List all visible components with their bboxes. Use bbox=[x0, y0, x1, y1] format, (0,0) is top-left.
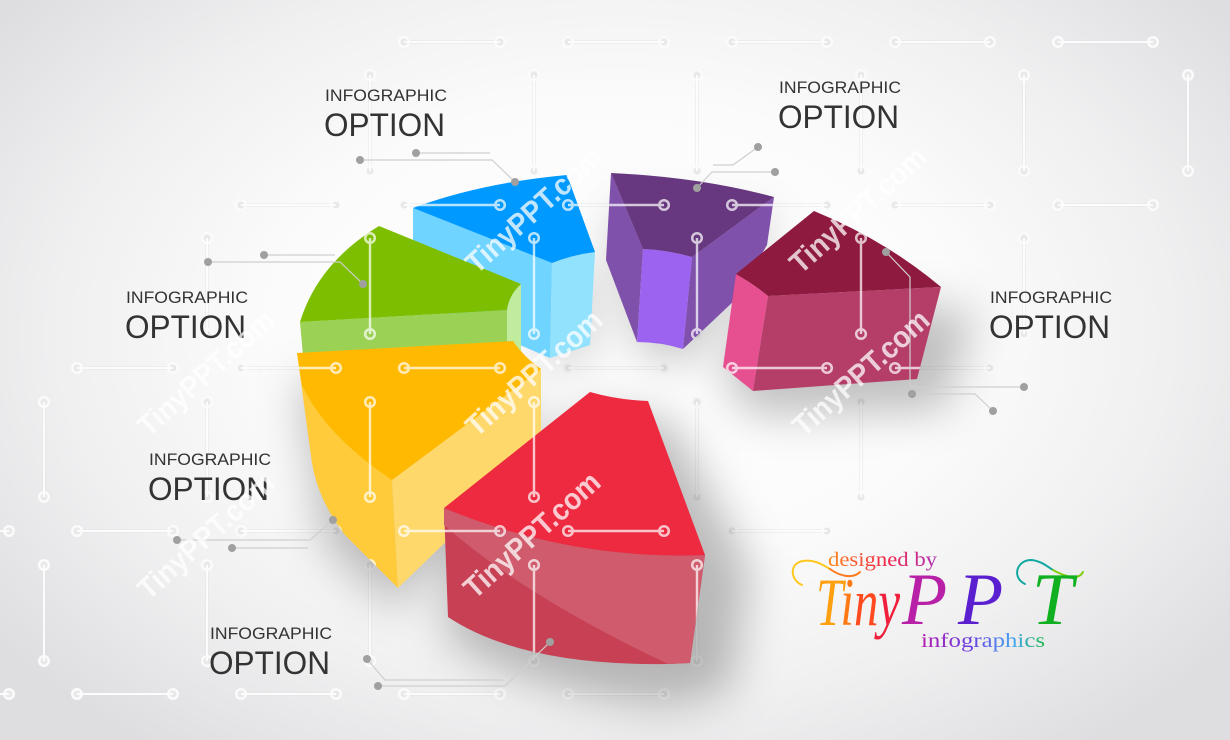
label: bottom option: INFOGRAPHIC bbox=[210, 624, 332, 643]
label: lower left option: OPTION bbox=[148, 471, 269, 507]
leader lines and dots bbox=[173, 143, 1028, 690]
watermarks: TinyPPT.com bbox=[786, 304, 936, 443]
logo: designed by TinyPPT infographics: T bbox=[1032, 559, 1078, 641]
label: lower left option bbox=[148, 450, 271, 507]
slice: yellow bbox=[297, 341, 541, 588]
slice: magenta bbox=[723, 211, 941, 391]
watermarks: TinyPPT.com bbox=[131, 467, 281, 606]
label: top right option bbox=[778, 78, 901, 135]
label: top left option: OPTION bbox=[324, 107, 445, 143]
label: lower left option: INFOGRAPHIC bbox=[149, 450, 271, 469]
watermarks: TinyPPT.com bbox=[783, 141, 933, 280]
pie chart bbox=[297, 173, 941, 664]
logo: designed by TinyPPT infographics: Tiny bbox=[816, 564, 901, 640]
label: bottom option bbox=[209, 624, 332, 681]
slice: blue bbox=[413, 175, 595, 358]
label: left option: OPTION bbox=[125, 309, 246, 345]
watermarks: TinyPPT.com bbox=[131, 304, 281, 443]
watermarks: TinyPPT.com bbox=[459, 141, 609, 280]
label: right option bbox=[989, 288, 1112, 345]
slice: green bbox=[300, 226, 521, 356]
label: top right option: INFOGRAPHIC bbox=[779, 78, 901, 97]
logo: designed by TinyPPT infographics bbox=[793, 549, 1083, 652]
label: top left option bbox=[324, 86, 447, 143]
label: left option bbox=[125, 288, 248, 345]
label: bottom option: OPTION bbox=[209, 645, 330, 681]
slice: red bbox=[444, 392, 705, 664]
label: left option: INFOGRAPHIC bbox=[126, 288, 248, 307]
label: right option: OPTION bbox=[989, 309, 1110, 345]
logo: designed by TinyPPT infographics: infographics bbox=[921, 630, 1045, 652]
watermarks bbox=[131, 141, 936, 606]
logo: designed by TinyPPT infographics: P bbox=[957, 559, 1003, 641]
drop shadows under chart pieces bbox=[297, 210, 975, 705]
logo: designed by TinyPPT infographics: designed by bbox=[828, 549, 937, 571]
label: top right option: OPTION bbox=[778, 99, 899, 135]
watermarks: TinyPPT.com bbox=[459, 304, 609, 443]
circuit lines over chart bbox=[299, 199, 920, 652]
slice: purple bbox=[606, 173, 774, 349]
label: top left option: INFOGRAPHIC bbox=[325, 86, 447, 105]
label: right option: INFOGRAPHIC bbox=[990, 288, 1112, 307]
watermarks: TinyPPT.com bbox=[457, 466, 607, 605]
logo: designed by TinyPPT infographics: P bbox=[901, 559, 947, 641]
